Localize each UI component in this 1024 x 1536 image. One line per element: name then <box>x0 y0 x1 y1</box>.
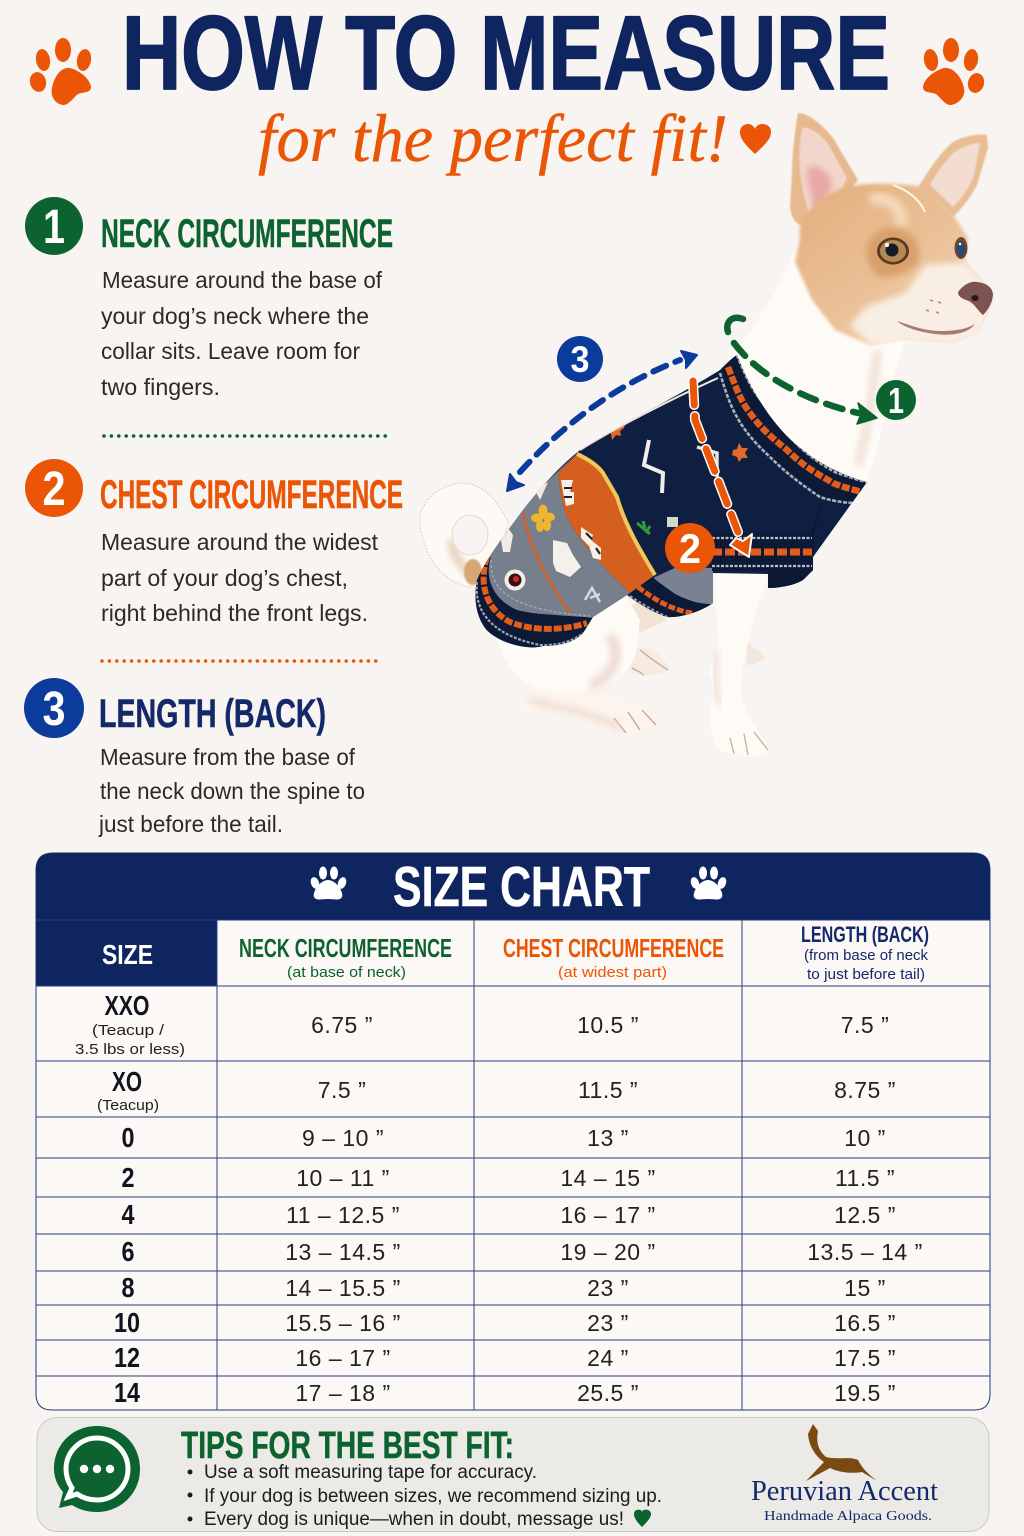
row 14: 25.5 ” <box>577 1380 639 1406</box>
row 12: 17.5 ” <box>834 1345 896 1371</box>
badge: length 3 <box>557 336 603 382</box>
tail <box>420 483 508 587</box>
row 12: 16 – 17 ” <box>295 1345 391 1371</box>
row XXO: 6.75 ” <box>311 1012 373 1038</box>
step 2: chest circumference <box>25 459 403 626</box>
column header: length: to just before tail) <box>807 966 925 983</box>
row 4 <box>122 1199 896 1230</box>
tips list: If your dog is between sizes, we recommend sizing up. <box>204 1486 662 1507</box>
icon: chat bubble <box>54 1426 140 1512</box>
left ear <box>790 113 858 235</box>
column header: neck: NECK CIRCUMFERENCE <box>239 933 452 963</box>
eyes <box>877 237 968 264</box>
badge: neck 1: 1 <box>888 380 904 421</box>
badge: neck 1 <box>876 380 916 421</box>
tips heading: TIPS FOR THE BEST FIT: <box>181 1425 514 1467</box>
column header: chest: CHEST CIRCUMFERENCE <box>503 933 724 963</box>
badge 1 <box>25 197 83 255</box>
row XO <box>97 1066 896 1114</box>
icon: heart <box>740 124 771 154</box>
badge 3: 3 <box>42 683 66 736</box>
instructions: the neck down the spine to <box>100 778 365 804</box>
instructions: Measure around the widest <box>101 529 379 555</box>
badge: chest 2: 2 <box>679 525 701 572</box>
icon: banner paw right <box>689 866 728 900</box>
neck <box>730 238 907 482</box>
step 3: length <box>24 678 365 837</box>
chest seam panel <box>768 500 823 592</box>
row 2: 11.5 ” <box>835 1165 895 1191</box>
column header: length: LENGTH (BACK) <box>801 922 929 947</box>
row XXO: (Teacup / <box>92 1022 165 1039</box>
tips list: Every dog is unique—when in doubt, message us! <box>204 1509 624 1530</box>
muzzle and face shading <box>850 185 995 346</box>
instructions: two fingers. <box>101 374 220 400</box>
size chart banner <box>36 853 990 920</box>
face <box>795 184 993 345</box>
instructions: right behind the front legs. <box>101 600 368 626</box>
instructions: collar sits. Leave room for <box>101 338 360 364</box>
row XXO: 7.5 ” <box>841 1012 889 1038</box>
instructions: your dog’s neck where the <box>101 303 369 329</box>
dog illustration <box>420 113 995 756</box>
row 14: 14 <box>114 1377 140 1408</box>
subtitle: for the perfect fit! <box>258 100 728 176</box>
lower grey panel <box>653 567 713 610</box>
row XO: 11.5 ” <box>578 1077 638 1103</box>
logo: Peruvian Accent: Handmade Alpaca Goods. <box>764 1509 932 1524</box>
tips list: Use a soft measuring tape for accuracy. <box>204 1462 537 1483</box>
row 12: 24 ” <box>587 1345 629 1371</box>
badge: chest 2 <box>665 523 715 573</box>
row 0: 9 – 10 ” <box>302 1125 384 1151</box>
row 4: 4 <box>122 1199 135 1230</box>
row 2: 10 – 11 ” <box>296 1165 390 1191</box>
row 2: 2 <box>122 1162 134 1193</box>
row XO: (Teacup) <box>97 1097 159 1114</box>
instructions <box>101 529 379 626</box>
badge: length 3: 3 <box>570 339 590 380</box>
row 14: 19.5 ” <box>834 1380 896 1406</box>
icon: banner paw left <box>309 866 348 900</box>
row 6: 19 – 20 ” <box>560 1239 656 1265</box>
column header: chest <box>503 933 724 981</box>
column header: length <box>801 922 929 983</box>
arrow 1: neck measure <box>727 318 877 424</box>
badge 3 <box>24 678 84 738</box>
rear hem <box>475 557 593 648</box>
row 4: 16 – 17 ” <box>560 1202 656 1228</box>
panel motifs <box>501 421 748 613</box>
tips list <box>188 1462 662 1530</box>
hind foot <box>518 687 657 735</box>
row 0: 0 <box>122 1122 134 1153</box>
arrow 2: chest measure <box>693 381 752 557</box>
row 0 <box>122 1122 886 1153</box>
instructions: part of your dog’s chest, <box>101 565 348 591</box>
icon: green heart <box>634 1510 651 1527</box>
row XXO <box>75 990 889 1058</box>
row 6 <box>122 1236 923 1267</box>
row 6: 13.5 – 14 ” <box>807 1239 923 1265</box>
icon: right paw <box>922 38 986 105</box>
row 8: 14 – 15.5 ” <box>285 1275 401 1301</box>
collar <box>718 355 867 504</box>
row 12 <box>114 1342 896 1373</box>
row 8: 15 ” <box>844 1275 886 1301</box>
sweater <box>475 355 867 648</box>
row 10: 15.5 – 16 ” <box>285 1310 401 1336</box>
column header: size: SIZE <box>102 939 153 970</box>
row 2 <box>122 1162 895 1193</box>
step 1: neck circumference <box>25 197 393 400</box>
row 14: 17 – 18 ” <box>295 1380 391 1406</box>
row 10 <box>114 1307 896 1338</box>
badge 1: 1 <box>43 201 65 254</box>
row XO: XO <box>112 1066 142 1097</box>
row 10: 23 ” <box>587 1310 629 1336</box>
column header: chest: (at widest part) <box>558 964 667 981</box>
column header: neck <box>239 933 452 981</box>
row 10: 16.5 ” <box>834 1310 896 1336</box>
right ear <box>918 135 988 217</box>
row 6: 13 – 14.5 ” <box>285 1239 401 1265</box>
dog head <box>790 113 995 346</box>
row 8: 8 <box>122 1272 134 1303</box>
row 14 <box>114 1377 896 1408</box>
row XXO: 3.5 lbs or less) <box>75 1041 185 1058</box>
row 8 <box>122 1272 886 1303</box>
heading: CHEST CIRCUMFERENCE <box>100 473 403 517</box>
heading: NECK CIRCUMFERENCE <box>101 212 393 256</box>
orange panel <box>558 454 655 593</box>
row XO: 7.5 ” <box>318 1077 366 1103</box>
logo: Peruvian Accent: Peruvian Accent <box>751 1475 938 1507</box>
heading: LENGTH (BACK) <box>99 692 326 736</box>
row 8: 23 ” <box>587 1275 629 1301</box>
row XXO: XXO <box>104 990 150 1021</box>
column header: length: (from base of neck <box>804 947 928 964</box>
grey rear panel <box>476 450 630 620</box>
row 4: 12.5 ” <box>834 1202 896 1228</box>
row XO: 8.75 ” <box>834 1077 896 1103</box>
size chart banner: SIZE CHART <box>393 855 650 919</box>
sleeve hem <box>712 533 814 571</box>
row 2: 14 – 15 ” <box>560 1165 656 1191</box>
column header: size <box>36 920 217 986</box>
badge 2: 2 <box>42 463 66 516</box>
front leg <box>708 570 770 756</box>
instructions <box>98 744 365 837</box>
panel: tips <box>37 1418 989 1532</box>
row 6: 6 <box>122 1236 134 1267</box>
icon: left paw <box>28 38 93 105</box>
size chart table <box>36 853 990 1410</box>
column header: neck: (at base of neck) <box>287 964 406 981</box>
row 12: 12 <box>114 1342 140 1373</box>
far legs <box>625 600 765 675</box>
logo: Peruvian Accent <box>751 1424 938 1524</box>
row 4: 11 – 12.5 ” <box>286 1202 400 1228</box>
nose and mouth <box>897 282 993 335</box>
table background <box>36 853 990 1410</box>
lower hem <box>630 578 712 618</box>
instructions: Measure from the base of <box>100 744 356 770</box>
instructions: just before the tail. <box>98 811 283 837</box>
haunch <box>493 590 640 693</box>
back trim line <box>580 378 718 450</box>
row 10: 10 <box>114 1307 140 1338</box>
badge 2 <box>25 459 83 517</box>
row 0: 10 ” <box>844 1125 886 1151</box>
instructions <box>101 267 383 400</box>
arrow 3: back length <box>507 351 697 491</box>
row XXO: 10.5 ” <box>577 1012 639 1038</box>
row 0: 13 ” <box>587 1125 629 1151</box>
instructions: Measure around the base of <box>102 267 383 293</box>
